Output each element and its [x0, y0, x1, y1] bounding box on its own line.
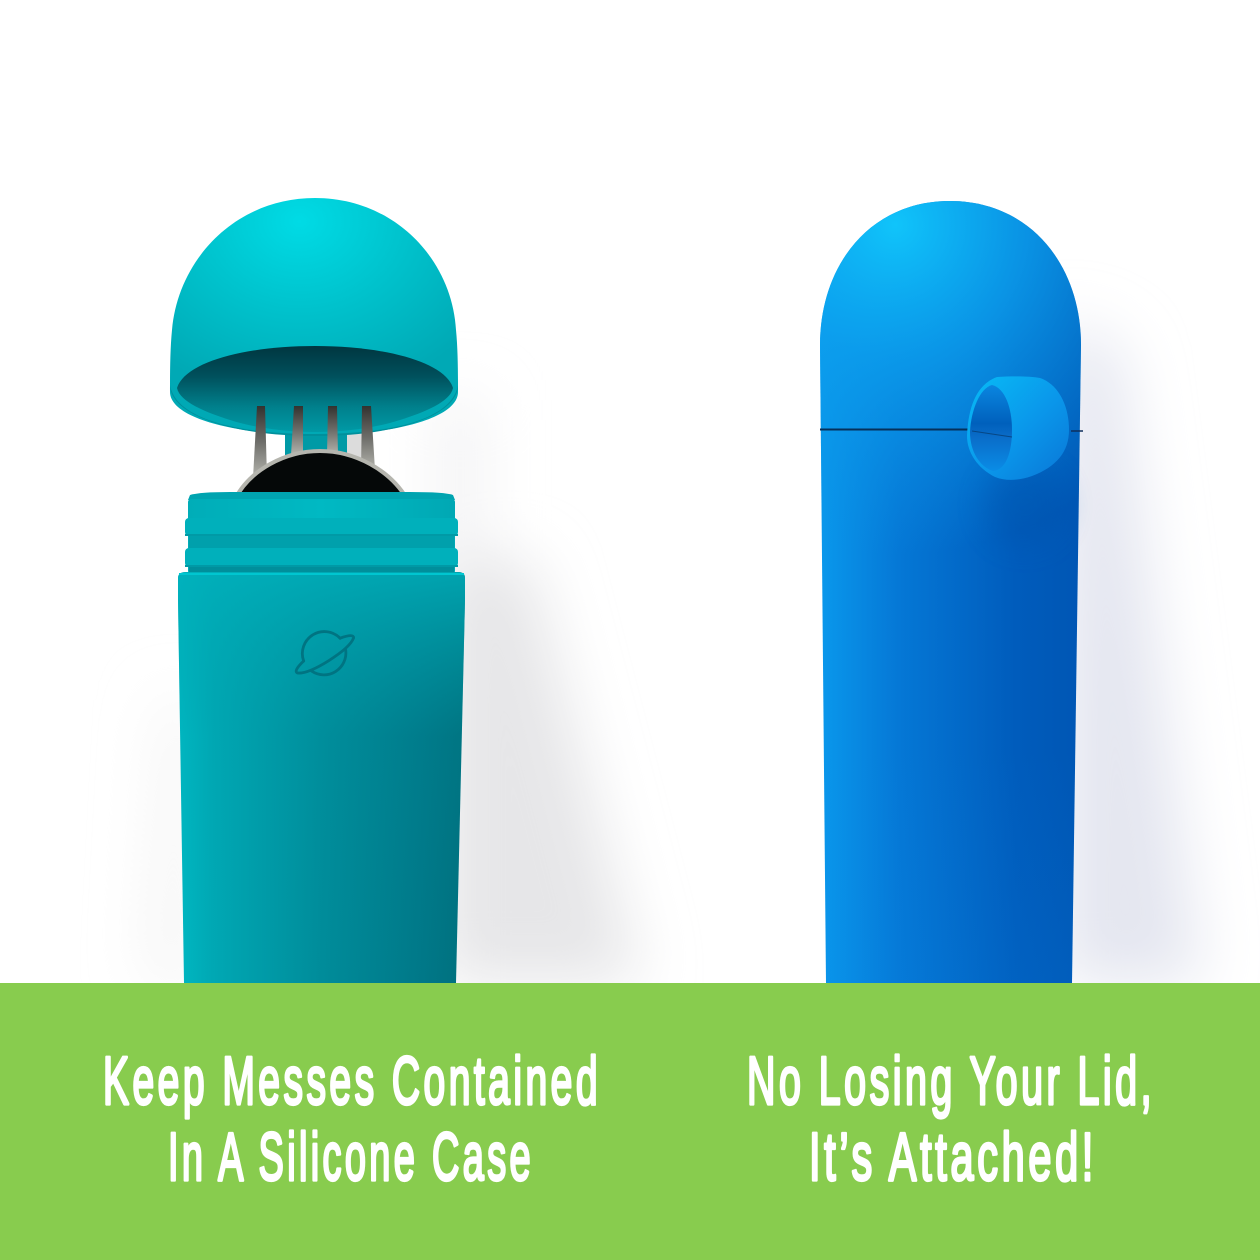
tether shadow — [985, 465, 1065, 545]
threaded collar — [185, 492, 458, 574]
caption: left: In A Silicone Case — [168, 1119, 534, 1195]
fork bowl — [235, 451, 407, 499]
icon: planet logo — [284, 617, 364, 689]
caption: left: Keep Messes Contained — [103, 1043, 601, 1119]
open lid — [170, 198, 458, 436]
case body — [820, 201, 1081, 983]
case shadows — [150, 320, 1200, 983]
panel: teal silicone case — [170, 198, 465, 983]
caption: right — [747, 1043, 1155, 1195]
lid interior — [177, 346, 453, 432]
case back tab — [285, 425, 347, 480]
lid seam — [820, 428, 972, 430]
case body — [178, 572, 465, 983]
attached lid loop — [967, 376, 1069, 480]
caption band — [0, 983, 1260, 1260]
panel: blue silicone case — [820, 201, 1083, 983]
fork tines — [253, 406, 375, 478]
caption: left — [103, 1043, 601, 1195]
